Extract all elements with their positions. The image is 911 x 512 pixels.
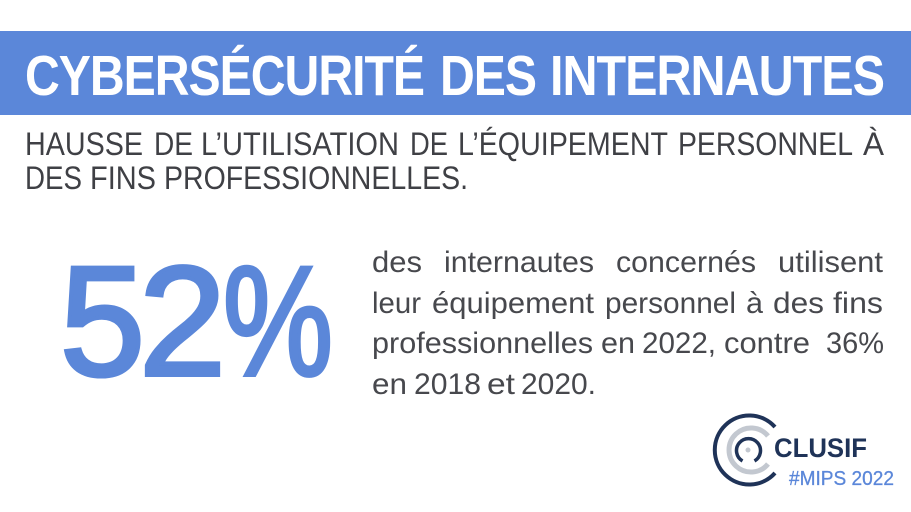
subtitle: [25, 126, 885, 196]
subtitle: À: [863, 126, 885, 162]
subtitle: L’ÉQUIPEMENT: [458, 126, 668, 162]
body text: internautes: [444, 246, 594, 279]
body text: à: [746, 287, 763, 320]
subtitle: DES: [25, 160, 82, 196]
body text: contre: [724, 327, 810, 360]
body text: concernés: [616, 246, 756, 279]
hashtag: #MIPS 2022: [789, 468, 894, 490]
body text: 2022,: [642, 327, 716, 360]
big number: 52%: [60, 235, 333, 409]
body text: 2020.: [521, 368, 596, 401]
title banner: [0, 31, 911, 115]
body text: des: [372, 246, 422, 279]
body text: 36%: [826, 327, 884, 360]
logo wordmark: CLUSIF: [774, 433, 867, 463]
subtitle: HAUSSE: [25, 126, 143, 162]
body text: et: [487, 368, 516, 401]
body text: 2018: [414, 368, 481, 401]
logo: Clusif: [715, 416, 894, 490]
subtitle: PERSONNEL: [678, 126, 853, 162]
body text: des: [773, 287, 824, 320]
subtitle: PROFESSIONNELLES.: [164, 160, 468, 196]
subtitle: L’UTILISATION: [201, 126, 399, 162]
title: CYBERSÉCURITÉ: [25, 44, 424, 108]
body text: en: [372, 368, 407, 401]
big number: 52%: 5: [60, 235, 145, 409]
body text: [372, 246, 884, 401]
subtitle: DE: [410, 126, 448, 162]
title: DES: [440, 44, 536, 108]
body text: équipement: [432, 287, 595, 320]
title: [25, 44, 884, 108]
body text: professionnelles: [372, 327, 593, 360]
body text: personnel: [605, 287, 736, 320]
subtitle: FINS: [90, 160, 156, 196]
body text: fins: [833, 287, 883, 320]
icon: concentric rings: [715, 416, 775, 484]
body text: leur: [372, 287, 421, 320]
big number: 52%: %: [223, 235, 333, 409]
subtitle: DE: [154, 126, 193, 162]
body text: en: [601, 327, 635, 360]
big number: 52%: 2: [139, 235, 226, 409]
body text: utilisent: [778, 246, 884, 279]
